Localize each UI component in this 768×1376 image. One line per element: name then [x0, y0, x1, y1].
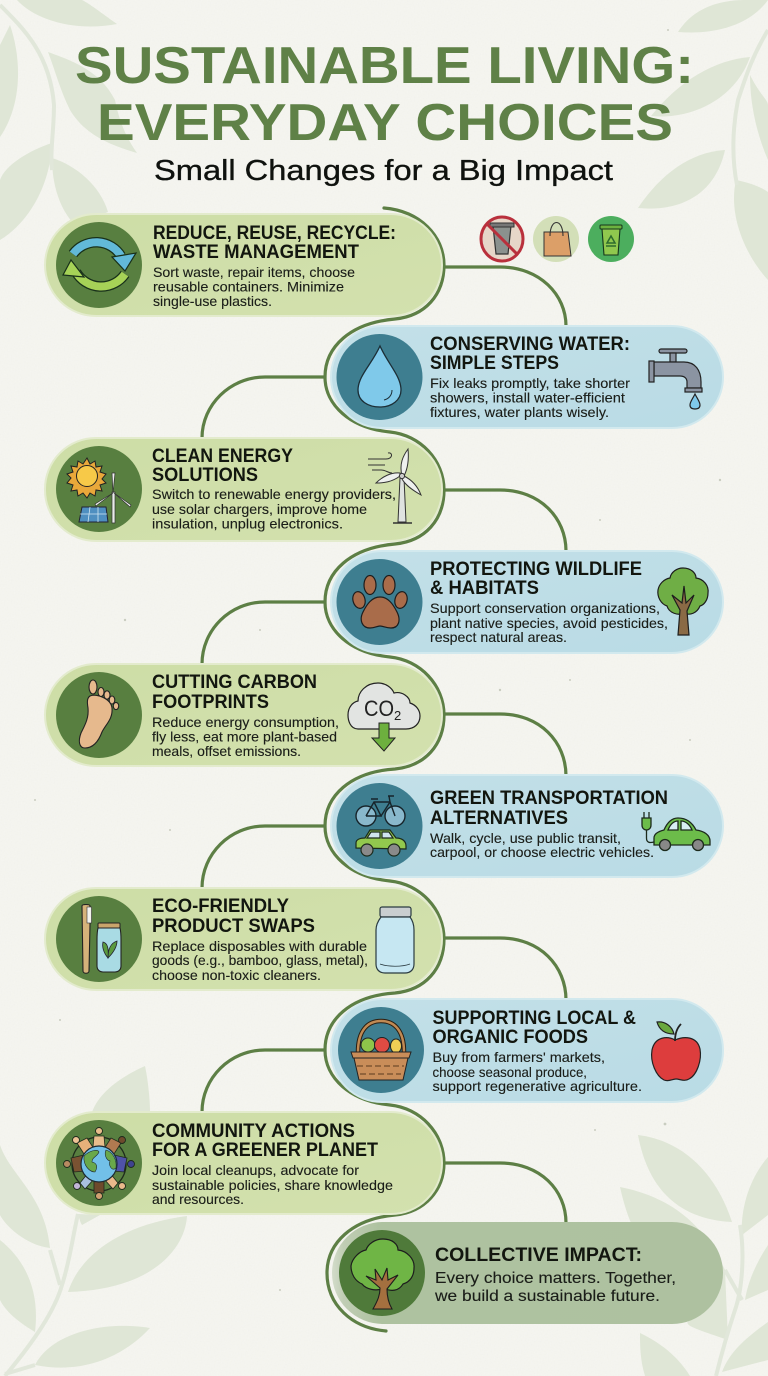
body text: reusable containers. Minimize [153, 280, 344, 294]
heading: WASTE MANAGEMENT [153, 242, 359, 263]
icon: recycle arrows [56, 222, 142, 308]
body text: fly less, eat more plant-based [152, 730, 337, 744]
body text: Every choice matters. Together, [435, 1270, 676, 1287]
body text: fixtures, water plants wisely. [430, 405, 609, 420]
icon: footprint [56, 672, 142, 758]
heading: COMMUNITY ACTIONS [152, 1121, 355, 1142]
body text: Switch to renewable energy providers, [152, 487, 396, 502]
panel: conserving water [331, 326, 723, 428]
panel: eco-friendly swaps [45, 888, 442, 990]
body text [434, 1270, 676, 1305]
body text: support regenerative agriculture. [432, 1079, 642, 1094]
body text: respect natural areas. [430, 630, 567, 645]
body text: single-use plastics. [153, 294, 272, 309]
body text: Support conservation organizations, [430, 601, 660, 616]
body text [152, 939, 368, 983]
heading: REDUCE, REUSE, RECYCLE: [153, 223, 396, 244]
heading [153, 223, 396, 263]
body text [430, 376, 631, 420]
panel: local organic foods [331, 999, 723, 1102]
body text [430, 601, 668, 645]
icon: CO2 cloud with arrow [348, 683, 420, 751]
heading [152, 672, 317, 713]
body text: Sort waste, repair items, choose [153, 265, 355, 280]
body text: plant native species, avoid pesticides, [430, 616, 668, 631]
icon: toothbrush and jar [56, 896, 142, 982]
icon: tree [658, 568, 708, 635]
heading: ALTERNATIVES [430, 808, 568, 829]
icon: people around globe [56, 1120, 142, 1206]
heading: CUTTING CARBON [152, 672, 317, 693]
heading [430, 788, 668, 829]
icon: sun, turbine, solar panel [56, 446, 142, 532]
heading: FOOTPRINTS [152, 692, 269, 713]
heading: CLEAN ENERGY [152, 446, 293, 467]
heading: CONSERVING WATER: [430, 334, 630, 355]
body text: and resources. [152, 1192, 244, 1207]
body text [432, 1050, 642, 1094]
heading [430, 559, 642, 599]
body text [152, 487, 396, 532]
body text [153, 265, 355, 309]
heading: ORGANIC FOODS [432, 1027, 588, 1048]
body text: carpool, or choose electric vehicles. [430, 845, 654, 860]
heading [152, 1121, 378, 1161]
heading: PRODUCT SWAPS [152, 916, 315, 937]
icon: CO2 cloud with arrow: CO [364, 696, 394, 721]
body text [430, 831, 654, 860]
panel: community actions [45, 1112, 442, 1214]
heading [152, 446, 293, 486]
body text: insulation, unplug electronics. [152, 516, 343, 532]
icon: fruit basket [338, 1007, 424, 1093]
body text: showers, install water-efficient [430, 390, 625, 406]
body text: sustainable policies, share knowledge [152, 1178, 393, 1193]
heading: COLLECTIVE IMPACT: [435, 1245, 642, 1266]
body text: choose seasonal produce, [432, 1065, 587, 1080]
icon: glass jar [376, 907, 414, 973]
body text [152, 1163, 393, 1207]
icon: faucet [649, 349, 702, 409]
body text [152, 715, 339, 759]
heading [152, 896, 315, 937]
icons: no trash, reusable bag, recycling bin [480, 216, 634, 262]
body text: Buy from farmers' markets, [432, 1050, 605, 1065]
body text: Join local cleanups, advocate for [152, 1163, 359, 1178]
body text: Walk, cycle, use public transit, [430, 831, 621, 846]
heading: SOLUTIONS [152, 465, 258, 486]
body text: choose non-toxic cleaners. [152, 968, 321, 983]
panel: protecting wildlife [331, 551, 723, 653]
icon: paw print [336, 559, 422, 645]
icon: tree [339, 1230, 425, 1316]
heading: SIMPLE STEPS [430, 353, 559, 374]
heading: FOR A GREENER PLANET [152, 1140, 378, 1161]
title: SUSTAINABLE LIVING: [75, 37, 694, 95]
heading: SUPPORTING LOCAL & [432, 1008, 636, 1029]
icon: apple [652, 1022, 700, 1081]
heading: GREEN TRANSPORTATION [430, 788, 668, 809]
panel: clean energy [45, 438, 442, 541]
heading: & HABITATS [430, 578, 539, 599]
panel: collective impact [332, 1222, 723, 1324]
heading: ECO-FRIENDLY [152, 896, 289, 917]
body text: meals, offset emissions. [152, 744, 301, 759]
heading: PROTECTING WILDLIFE [430, 559, 642, 580]
body text: use solar chargers, improve home [152, 502, 367, 517]
icon: water drop [336, 334, 422, 420]
panel: reduce reuse recycle [45, 214, 442, 316]
icon: electric car [642, 812, 710, 850]
body text: Replace disposables with durable [152, 939, 367, 954]
body text: we build a sustainable future. [434, 1288, 660, 1305]
subtitle: Small Changes for a Big Impact [154, 155, 613, 187]
body text: Fix leaks promptly, take shorter [430, 376, 631, 391]
icon: bicycle and car [336, 783, 422, 869]
title [75, 37, 694, 152]
connector path [202, 208, 566, 1331]
panel: green transportation [331, 775, 723, 877]
body text: Reduce energy consumption, [152, 715, 339, 730]
panel: cutting carbon [45, 664, 442, 766]
icon: CO2 cloud with arrow: 2 [394, 708, 401, 723]
heading [432, 1008, 636, 1048]
heading [430, 334, 630, 374]
title: EVERYDAY CHOICES [97, 94, 673, 152]
body text: goods (e.g., bamboo, glass, metal), [152, 953, 368, 968]
icon: wind turbine [368, 449, 421, 523]
